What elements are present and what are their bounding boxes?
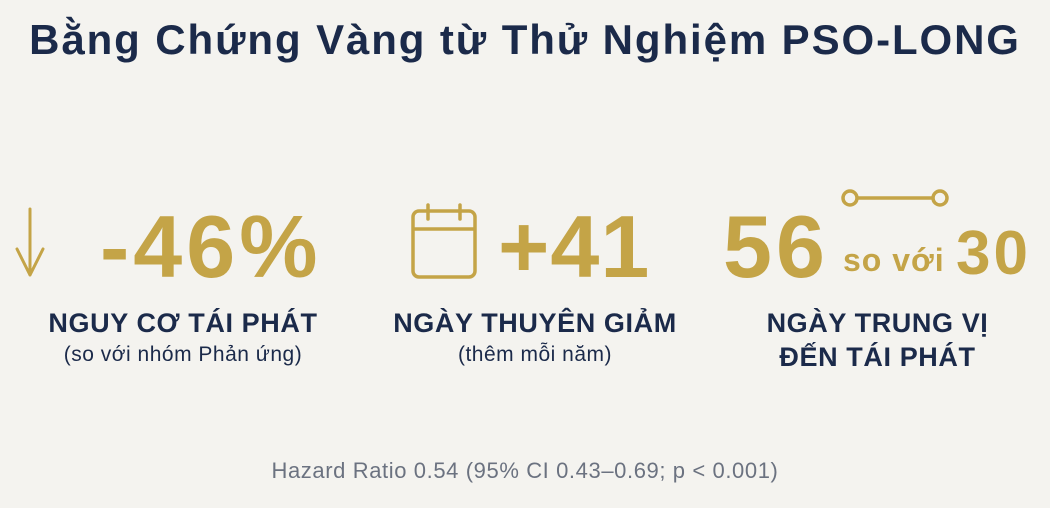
icon: down arrow	[15, 208, 44, 277]
stat: 56 vs 30: 30	[956, 219, 1031, 288]
title: Bằng Chứng Vàng từ Thử Nghiệm PSO-LONG	[29, 16, 1021, 63]
panel: median days to relapse	[723, 189, 1031, 372]
subtext: (so với nhóm Phản ứng)	[64, 343, 302, 366]
stat: +41: +41	[498, 197, 650, 296]
subtext: (thêm mỗi năm)	[458, 343, 612, 366]
stat: 56 vs 30	[723, 197, 1031, 296]
label: median days: ĐẾN TÁI PHÁT	[779, 342, 976, 372]
icon: connector	[841, 189, 949, 207]
stat: 56 vs 30: 56	[723, 197, 829, 296]
footer: hazard ratio: Hazard Ratio 0.54 (95% CI 0.43–0.69; p < 0.001)	[271, 458, 778, 483]
label: relapse risk: NGUY CƠ TÁI PHÁT	[48, 308, 318, 338]
panel: remission days	[393, 197, 677, 366]
panel: relapse risk	[15, 197, 321, 366]
label: median days	[767, 308, 988, 372]
label: remission days: NGÀY THUYÊN GIẢM	[393, 308, 677, 338]
stat: 56 vs 30: so với	[843, 242, 945, 278]
icon: calendar	[411, 203, 477, 279]
stat: -46%: -46%	[100, 197, 321, 296]
label: median days: NGÀY TRUNG VỊ	[767, 308, 988, 338]
